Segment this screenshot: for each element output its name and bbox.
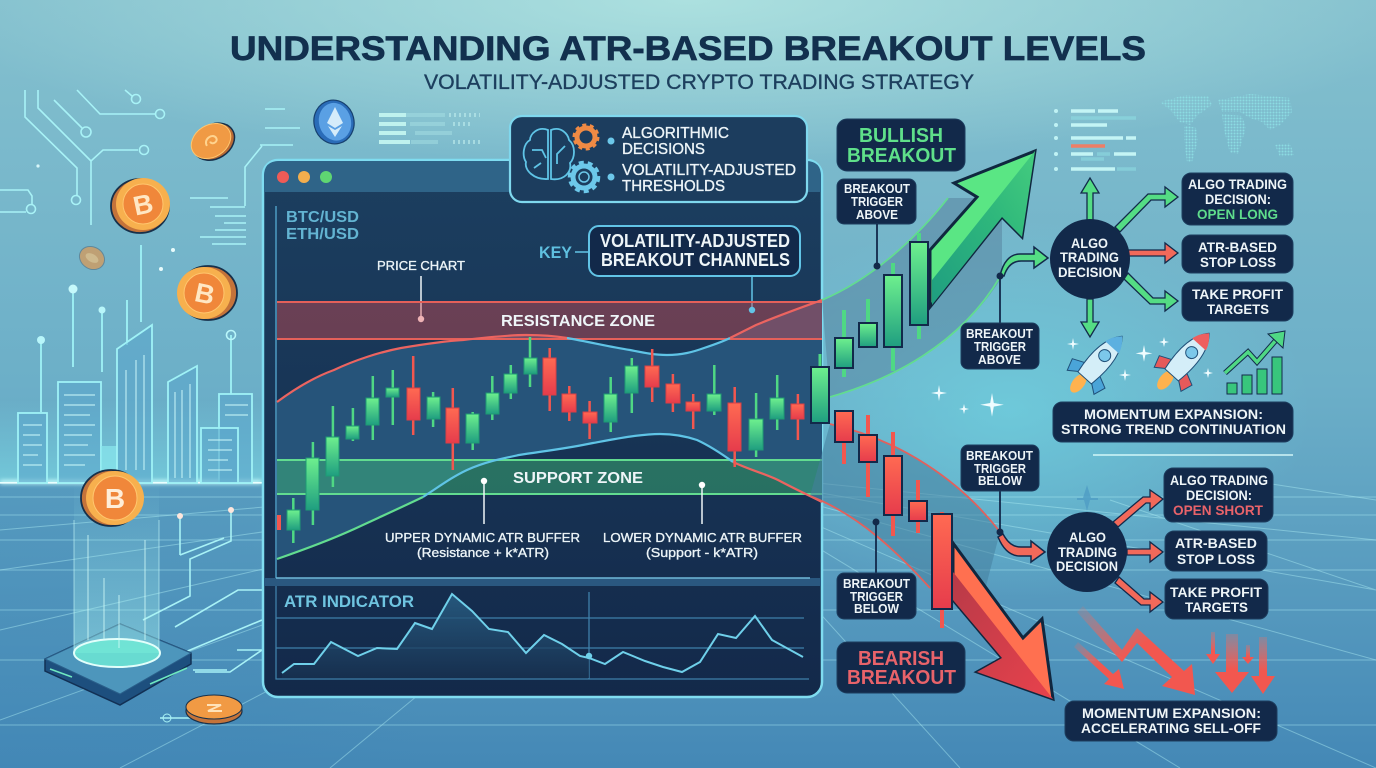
- arrow: down: [1081, 299, 1099, 337]
- panel text: [622, 125, 796, 195]
- data ticker near coin: [379, 115, 480, 142]
- icon: small diamond marker: [1077, 485, 1098, 511]
- upper dynamic ATR buffer line: [277, 300, 822, 402]
- callout: trigger above right: ABOVE: [978, 353, 1021, 367]
- bullish algo decision flow: [1050, 173, 1293, 337]
- candle: breakout bar: [811, 354, 829, 423]
- panel text: VOLATILITY-ADJUSTED: [622, 162, 796, 179]
- panel text: DECISIONS: [622, 141, 705, 158]
- lower buffer label: (Support - k*ATR): [646, 545, 758, 560]
- key label: KEY: [539, 243, 573, 262]
- bullish channel: [822, 198, 1002, 397]
- icon: blue rocket: [1055, 322, 1138, 407]
- node: algo trading decision: ALGO: [1071, 235, 1108, 251]
- ATR channel: [277, 300, 822, 559]
- node: algo trading decision: TRADING: [1060, 249, 1119, 265]
- label: bearish breakout: BEARISH: [858, 648, 944, 670]
- coin: bitcoin large upper: B: [131, 188, 156, 221]
- coin: bitcoin pedestal: [81, 470, 144, 526]
- node: algo trading decision: ALGO: [1069, 529, 1106, 545]
- callout: trigger below left: BELOW: [854, 602, 899, 616]
- box: open long: DECISION:: [1205, 191, 1271, 207]
- node: algo trading decision: DECISION: [1056, 558, 1118, 574]
- label: bullish breakout: [837, 119, 965, 171]
- node: algo trading decision: [1047, 512, 1127, 592]
- callout: trigger below right: BREAKOUT: [966, 449, 1033, 463]
- icon: falling vertical arrows: [1206, 632, 1275, 694]
- city skyline: [18, 245, 252, 483]
- arrow: stop loss: [1128, 243, 1178, 263]
- price chart label: [377, 258, 465, 322]
- price chart label: PRICE CHART: [377, 258, 465, 273]
- box: take profit: TAKE PROFIT: [1192, 286, 1283, 302]
- box: momentum expansion bullish: [1053, 402, 1293, 442]
- subtitle: VOLATILITY-ADJUSTED CRYPTO TRADING STRATEGY: [424, 71, 974, 94]
- arrow: bullish: [930, 151, 1035, 307]
- callout: trigger above left: ABOVE: [856, 208, 898, 222]
- key label: BREAKOUT CHANNELS: [601, 250, 790, 270]
- sparkles around rockets: [1067, 337, 1213, 381]
- box: take profit: [1165, 579, 1268, 619]
- box: momentum expansion bearish: MOMENTUM EXPANSION:: [1082, 705, 1261, 721]
- arrow: stop loss: [1127, 542, 1163, 562]
- icon: growth chart: [1225, 331, 1285, 394]
- callout: trigger above right: TRIGGER: [974, 340, 1026, 354]
- lower buffer label: [603, 530, 802, 560]
- arrow: bearish: [953, 543, 1053, 699]
- callout: trigger below right: BELOW: [978, 474, 1022, 488]
- key label: [539, 226, 800, 310]
- callout: trigger above left: [837, 179, 916, 270]
- box: stop loss: [1165, 531, 1267, 571]
- box: open short: OPEN SHORT: [1173, 502, 1263, 518]
- box: stop loss: STOP LOSS: [1177, 551, 1255, 567]
- arrow: to algo decision bullish: [1000, 247, 1048, 276]
- node: algo trading decision: DECISION: [1058, 264, 1122, 280]
- box: take profit: TARGETS: [1207, 301, 1269, 317]
- callout: trigger below left: BREAKOUT: [843, 577, 910, 591]
- ATR indicator chart: ATR INDICATOR: [284, 592, 414, 611]
- symbols list: ETH/USD: [286, 226, 359, 243]
- support zone: SUPPORT ZONE: [513, 470, 643, 487]
- upper buffer label: UPPER DYNAMIC ATR BUFFER: [385, 530, 580, 545]
- coin: lying flat: [186, 695, 242, 724]
- window frame: [263, 160, 822, 697]
- callout: trigger above left: BREAKOUT: [844, 182, 910, 196]
- coin: bitcoin large upper: [111, 178, 170, 233]
- data lines: [1054, 109, 1136, 171]
- box: stop loss: ATR-BASED: [1175, 535, 1257, 551]
- bullish candles: [835, 233, 928, 377]
- upper buffer label: [385, 530, 580, 560]
- callout: trigger below right: [961, 445, 1039, 536]
- arrow: take profit: [1124, 273, 1178, 311]
- label: bearish breakout: BREAKOUT: [847, 667, 956, 689]
- callout: trigger below left: [837, 518, 916, 619]
- upper buffer label: (Resistance + k*ATR): [417, 545, 549, 560]
- title: UNDERSTANDING ATR-BASED BREAKOUT LEVELS: [230, 30, 1146, 68]
- icon: brain: [524, 129, 574, 179]
- coin: bitcoin right: [177, 266, 237, 320]
- label: bullish breakout: BULLISH: [859, 125, 943, 147]
- box: take profit: TARGETS: [1185, 599, 1248, 615]
- coin: ethereum: [309, 96, 359, 148]
- callout: trigger above right: [961, 272, 1039, 369]
- box: take profit: [1182, 282, 1293, 321]
- callout: trigger above left: TRIGGER: [851, 195, 903, 209]
- lower buffer label: LOWER DYNAMIC ATR BUFFER: [603, 530, 802, 545]
- box: momentum expansion bearish: ACCELERATING SELL-OFF: [1081, 720, 1261, 736]
- icon: falling small arrow: [1074, 642, 1124, 689]
- symbols list: [286, 209, 359, 243]
- box: open long: OPEN LONG: [1197, 206, 1278, 222]
- icon: red rocket: [1142, 319, 1225, 404]
- label: bullish breakout: BREAKOUT: [847, 145, 956, 167]
- arrow: take profit: [1115, 577, 1163, 612]
- arrow: open long: [1115, 187, 1178, 232]
- arrow: up: [1081, 178, 1099, 220]
- key label: VOLATILITY-ADJUSTED: [600, 231, 790, 251]
- box: stop loss: ATR-BASED: [1198, 239, 1277, 255]
- window title bar: [264, 161, 821, 192]
- box: stop loss: [1182, 235, 1293, 273]
- box: open short: ALGO TRADING: [1170, 472, 1268, 488]
- world map: [1160, 94, 1294, 162]
- panel: chart window: [263, 160, 822, 697]
- box: momentum expansion bullish: STRONG TREND CONTINUATION: [1061, 421, 1286, 437]
- box: stop loss: STOP LOSS: [1200, 254, 1276, 270]
- ATR indicator chart: [276, 586, 809, 679]
- bearish candles: [835, 411, 952, 628]
- bearish algo decision flow: [1047, 468, 1273, 619]
- resistance zone: [277, 302, 822, 340]
- coin: small faded: [75, 242, 109, 274]
- arrow: open short: [1113, 490, 1163, 527]
- panel: algorithmic decisions: [510, 116, 807, 202]
- holographic pedestal: [45, 482, 191, 705]
- arrow: to algo decision bearish: [998, 534, 1045, 562]
- callout: trigger below right: TRIGGER: [974, 462, 1026, 476]
- box: open long: [1182, 173, 1293, 225]
- box: momentum expansion bullish: MOMENTUM EXPANSION:: [1084, 406, 1263, 422]
- divider: [264, 578, 821, 586]
- panel text: THRESHOLDS: [622, 178, 725, 195]
- box: take profit: TAKE PROFIT: [1170, 584, 1262, 600]
- icon: blue gear: [570, 162, 598, 192]
- buffer callout dots: [481, 307, 755, 524]
- coin: bitcoin pedestal: B: [105, 483, 125, 514]
- support zone: [277, 460, 822, 494]
- node: algo trading decision: TRADING: [1058, 544, 1117, 560]
- icon: orange gear: [574, 125, 598, 149]
- candlestick chart: [277, 337, 804, 543]
- coin: top tilted: [185, 115, 241, 168]
- window control dots: [277, 171, 332, 183]
- resistance zone: RESISTANCE ZONE: [501, 313, 655, 330]
- circuit lines decoration: [0, 90, 300, 722]
- icon: falling zigzag arrow: [1077, 606, 1195, 695]
- panel text: ALGORITHMIC: [622, 125, 729, 142]
- lower dynamic ATR buffer line: [277, 434, 822, 559]
- coin: bitcoin right: B: [192, 277, 217, 311]
- label: bearish breakout: [837, 642, 965, 693]
- box: open short: DECISION:: [1186, 487, 1252, 503]
- bearish channel: [810, 424, 1000, 605]
- sparkles: [931, 385, 1004, 417]
- box: momentum expansion bearish: [1065, 701, 1277, 741]
- callout: trigger below left: TRIGGER: [850, 590, 903, 604]
- symbols list: BTC/USD: [286, 209, 359, 226]
- callout: trigger above right: BREAKOUT: [966, 327, 1033, 341]
- box: open long: ALGO TRADING: [1188, 176, 1287, 192]
- box: open short: [1164, 468, 1273, 522]
- node: algo trading decision: [1050, 219, 1130, 299]
